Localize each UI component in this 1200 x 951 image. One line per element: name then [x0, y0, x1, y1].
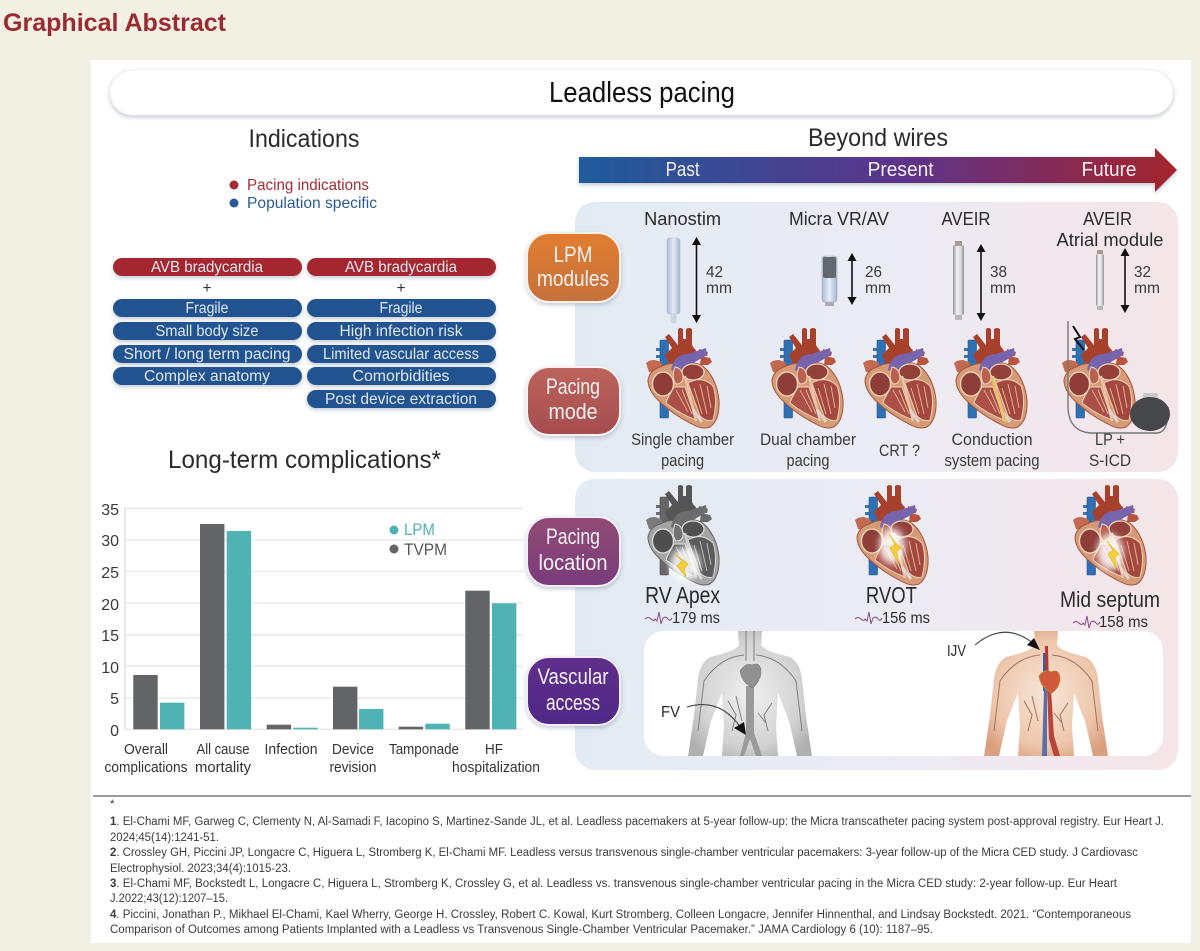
y axis labels: 5 — [110, 691, 119, 708]
y axis labels — [101, 502, 119, 740]
indications column 2: Limited vascular access — [323, 346, 479, 363]
references: 4. Piccini, Jonathan P., Mikhael El-Chami, Kael Wherry, George H. Crossley, Robert C. Kowal, Kurt Stromberg, Colleen Longacre, Jennifer Hinnenthal, and Lindsay Bockstedt. 2021. “Contemporaneous — [110, 909, 1131, 921]
device: Nanostim: 42 — [706, 264, 723, 281]
femoral vein access figure: FV — [661, 704, 680, 721]
heart and label: CRT: CRT ? — [879, 441, 920, 460]
references — [110, 799, 1164, 936]
heading: Indications: Indications — [248, 125, 360, 153]
y axis labels: 30 — [101, 533, 119, 550]
chart legend: TVPM — [404, 540, 447, 559]
indications column 1: Small body size — [156, 323, 258, 340]
label pill: Pacing location: location — [538, 550, 608, 575]
indications column 1 — [113, 258, 302, 385]
device: AVEIR: AVEIR — [942, 209, 990, 229]
device: Micra VR/AV: 26 — [865, 264, 882, 281]
timeline arrow: Future — [1082, 159, 1136, 181]
indications column 2 — [307, 258, 496, 408]
device: AVEIR — [942, 209, 1016, 321]
panel: devices and pacing mode — [575, 202, 1178, 472]
label pill: Pacing location — [527, 517, 620, 586]
device: Micra VR/AV — [789, 209, 891, 306]
pacing site: RVOT: RVOT — [866, 582, 917, 608]
device: Nanostim: mm — [706, 280, 732, 297]
device: AVEIR atrial module: 32 — [1134, 264, 1151, 281]
heart and label: single chamber pacing: pacing — [661, 451, 704, 470]
label pill: LPM modules — [527, 233, 620, 302]
y axis labels: 35 — [101, 502, 119, 519]
indications column 1: + — [202, 280, 212, 297]
legend: indications: Pacing indications — [247, 177, 369, 194]
label pill: Pacing location: Pacing — [546, 524, 600, 549]
references: 1. El-Chami MF, Garweg C, Clementy N, Al-Samadi F, Iacopino S, Martinez-Sande JL, et al. Leadless pacemakers at 5-year follow-up: the Micra transcatheter pacing system post-approval registry. Eur Heart J. — [110, 816, 1164, 828]
legend: indications — [230, 177, 377, 212]
indications column 2: Comorbidities — [352, 368, 450, 385]
indications column 2: + — [396, 280, 406, 297]
label pill: Pacing mode: mode — [548, 399, 598, 424]
y axis labels: 20 — [101, 597, 119, 614]
femoral vein access figure — [661, 631, 812, 756]
pacing site: mid septum — [1060, 485, 1160, 631]
indications column 2: AVB bradycardia — [345, 259, 457, 276]
heading: Long-term complications: Long-term complications* — [168, 446, 441, 474]
heading: Beyond wires: Beyond wires — [808, 124, 948, 152]
pacing site: RV apex — [645, 485, 721, 627]
title banner: Leadless pacing: Leadless pacing — [549, 77, 735, 109]
references: J.2022;43(12):1207–15. — [110, 893, 228, 905]
y axis labels: 10 — [101, 660, 119, 677]
device: Micra VR/AV: Micra VR/AV — [789, 209, 889, 229]
device: AVEIR atrial module: Atrial module — [1056, 230, 1164, 250]
x axis labels: Device — [332, 742, 374, 758]
heart with S-ICD and label: LP + S-ICD: S-ICD — [1089, 451, 1131, 470]
device: Nanostim: Nanostim — [644, 209, 721, 229]
pacing site: mid septum: Mid septum — [1060, 587, 1160, 612]
x axis labels: Tamponade — [389, 742, 459, 758]
y axis labels: 0 — [110, 723, 119, 740]
bar chart: long-term complications — [101, 502, 540, 776]
x axis labels: hospitalization — [452, 760, 540, 776]
pacing site: RVOT: 156 ms — [882, 610, 930, 627]
indications column 2: Fragile — [380, 300, 422, 317]
label pill: Vascular access: Vascular — [538, 664, 608, 689]
title banner: Leadless pacing — [110, 70, 1173, 115]
pacing site: RV apex: RV Apex — [645, 582, 721, 608]
vascular access white card — [644, 631, 1163, 756]
x axis labels: Overall — [124, 742, 168, 758]
heart and label: dual chamber pacing: Dual chamber — [760, 430, 856, 449]
references: 2024;45(14):1241-51. — [110, 832, 219, 844]
divider above references — [93, 795, 1191, 797]
references: Comparison of Outcomes among Patients Implanted with a Leadless vs Transvenous Single-Chamber Ventricular Pacemaker.” JAMA Cardiology 6 (10): 1187–95. — [110, 924, 933, 936]
y axis labels: 25 — [101, 565, 119, 582]
chart legend: LPM — [404, 520, 435, 539]
indications column 1: AVB bradycardia — [151, 259, 263, 276]
x axis labels: mortality — [195, 760, 252, 776]
label pill: LPM modules: modules — [537, 266, 609, 291]
pacing site: RV apex: 179 ms — [672, 610, 720, 627]
device: AVEIR atrial module: AVEIR — [1083, 209, 1132, 229]
x axis labels: All cause — [196, 742, 250, 758]
jugular vein access figure — [947, 631, 1108, 756]
x axis labels — [104, 742, 540, 776]
legend: indications: Population specific — [247, 195, 377, 212]
label pill: Pacing mode: Pacing — [546, 374, 600, 399]
device: Micra VR/AV: mm — [865, 280, 891, 297]
device: AVEIR atrial module — [1056, 209, 1164, 313]
LPM bars — [160, 531, 516, 729]
pacing site: RVOT — [855, 485, 930, 627]
label pill: Vascular access: access — [546, 690, 600, 715]
heart and label: dual chamber pacing: pacing — [786, 451, 830, 470]
indications column 1: Complex anatomy — [144, 368, 270, 385]
heading: Graphical Abstract: Graphical Abstract — [3, 9, 227, 37]
device: AVEIR atrial module: mm — [1134, 280, 1160, 297]
indications column 1: Fragile — [186, 300, 228, 317]
label pill: Pacing mode — [527, 367, 620, 435]
x axis labels: revision — [330, 760, 376, 776]
y axis labels: 15 — [101, 628, 119, 645]
heart and label: conduction system pacing — [944, 328, 1040, 470]
heart and label: single chamber pacing — [631, 328, 734, 470]
x axis labels: HF — [485, 742, 503, 758]
heart and label: conduction system pacing: Conduction — [952, 430, 1032, 449]
heart and label: single chamber pacing: Single chamber — [631, 430, 734, 449]
timeline arrow — [579, 148, 1177, 192]
pacing site: mid septum: 158 ms — [1099, 614, 1148, 631]
heart and label: conduction system pacing: system pacing — [944, 451, 1040, 470]
device: Nanostim — [644, 209, 732, 323]
jugular vein access figure: IJV — [947, 643, 966, 660]
heart with S-ICD and label: LP + S-ICD: LP + — [1095, 430, 1125, 449]
references: 3. El-Chami MF, Bockstedt L, Longacre C, Higuera L, Stromberg K, Crossley G, et al. Leadless vs. transvenous single-chamber ventricular pacing in the Micra CED study: 2-year follow-up. Eur Heart — [110, 878, 1118, 890]
device: AVEIR: 38 — [990, 264, 1007, 281]
timeline arrow: Past — [666, 159, 700, 181]
heart and label: dual chamber pacing — [760, 328, 856, 470]
chart legend — [390, 520, 447, 559]
indications column 2: High infection risk — [340, 323, 463, 340]
label pill: LPM modules: LPM — [554, 242, 592, 267]
references: 2. Crossley GH, Piccini JP, Longacre C, Higuera L, Stromberg K, El-Chami MF. Leadless versus transvenous single-chamber ventricular pacemakers: 3-year follow-up of the Micra CED study. J Cardiovasc — [110, 847, 1138, 859]
panel: pacing location and vascular access — [575, 479, 1178, 770]
indications column 2: Post device extraction — [325, 391, 477, 408]
heart and label: CRT — [863, 328, 936, 460]
x axis labels: Infection — [264, 742, 318, 758]
references: Electrophysiol. 2023;34(4):1015-23. — [110, 863, 291, 875]
references: * — [110, 799, 115, 811]
label pill: Vascular access — [527, 657, 620, 725]
device: AVEIR: mm — [990, 280, 1016, 297]
TVPM bars — [133, 524, 490, 729]
x axis labels: complications — [104, 760, 188, 776]
indications column 1: Short / long term pacing — [124, 346, 290, 363]
timeline arrow: Present — [868, 159, 934, 181]
heart with S-ICD and label: LP + S-ICD — [1062, 321, 1170, 470]
